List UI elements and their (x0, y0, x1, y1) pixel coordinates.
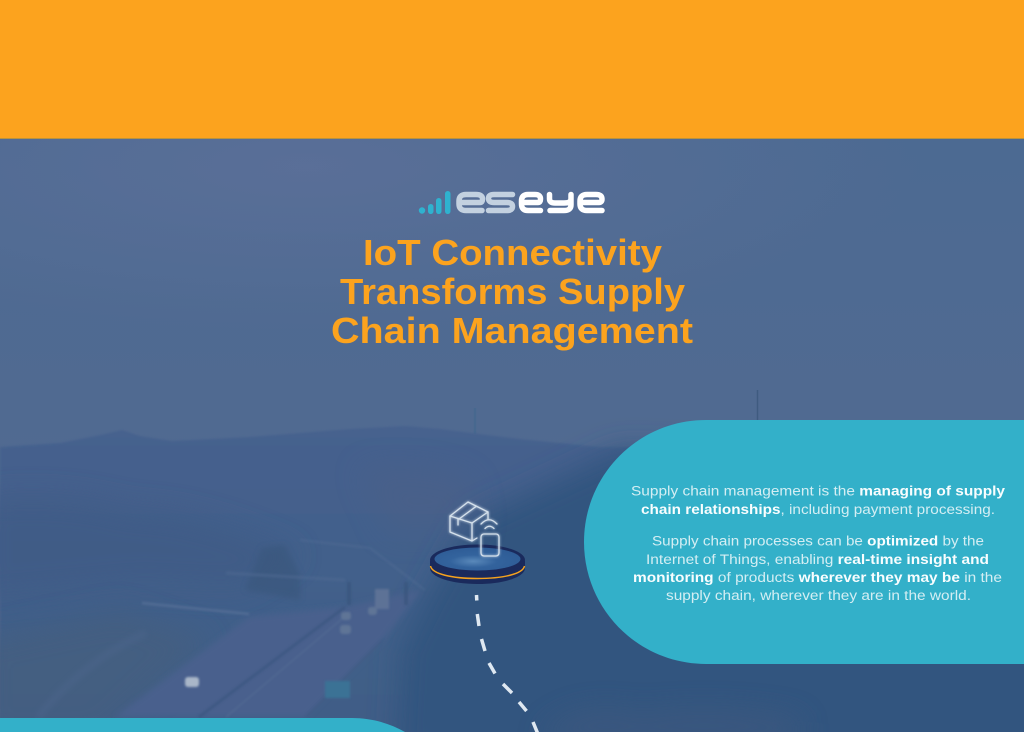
text block: definition: chain relationships , including payment processing. (641, 502, 995, 517)
logo signal bars (419, 191, 450, 214)
panel: bottom teal panel (0, 718, 405, 732)
vehicles on highway (185, 589, 389, 687)
title: IoT Connectivity (363, 232, 662, 273)
text block: IoT optimisation: supply chain, wherever they are in the world. (666, 588, 971, 603)
icon: wireless waves (481, 520, 497, 528)
text block: definition (631, 484, 1006, 517)
title: Chain Management (331, 310, 693, 351)
orange header band (0, 0, 1024, 139)
distant tower left (474, 408, 476, 434)
icon: parcel and tracker (450, 502, 499, 556)
overpass bridges (142, 540, 425, 614)
logo wordmark (459, 194, 602, 210)
highway carriageways (115, 590, 421, 717)
title: Transforms Supply (340, 271, 685, 312)
logo: eseye (419, 191, 602, 214)
distant tower right (756, 390, 758, 422)
text block: IoT optimisation: Supply chain processes can be optimized by the (652, 534, 984, 548)
panel: supply chain description (584, 420, 1024, 664)
text block: IoT optimisation (633, 534, 1002, 603)
icon: parcel box (450, 502, 488, 541)
text block: definition: Supply chain management is the managing of supply (631, 484, 1006, 498)
road sign (325, 681, 350, 698)
text block: IoT optimisation: Internet of Things, enabling real-time insight and (646, 552, 989, 567)
dashed route arrow (476, 595, 538, 732)
icon: phone tracker (481, 534, 499, 556)
title (331, 232, 693, 351)
text block: IoT optimisation: monitoring of products wherever they may be in the (633, 570, 1002, 585)
icon: platform disc (430, 544, 525, 584)
woodland masses (395, 450, 1024, 732)
